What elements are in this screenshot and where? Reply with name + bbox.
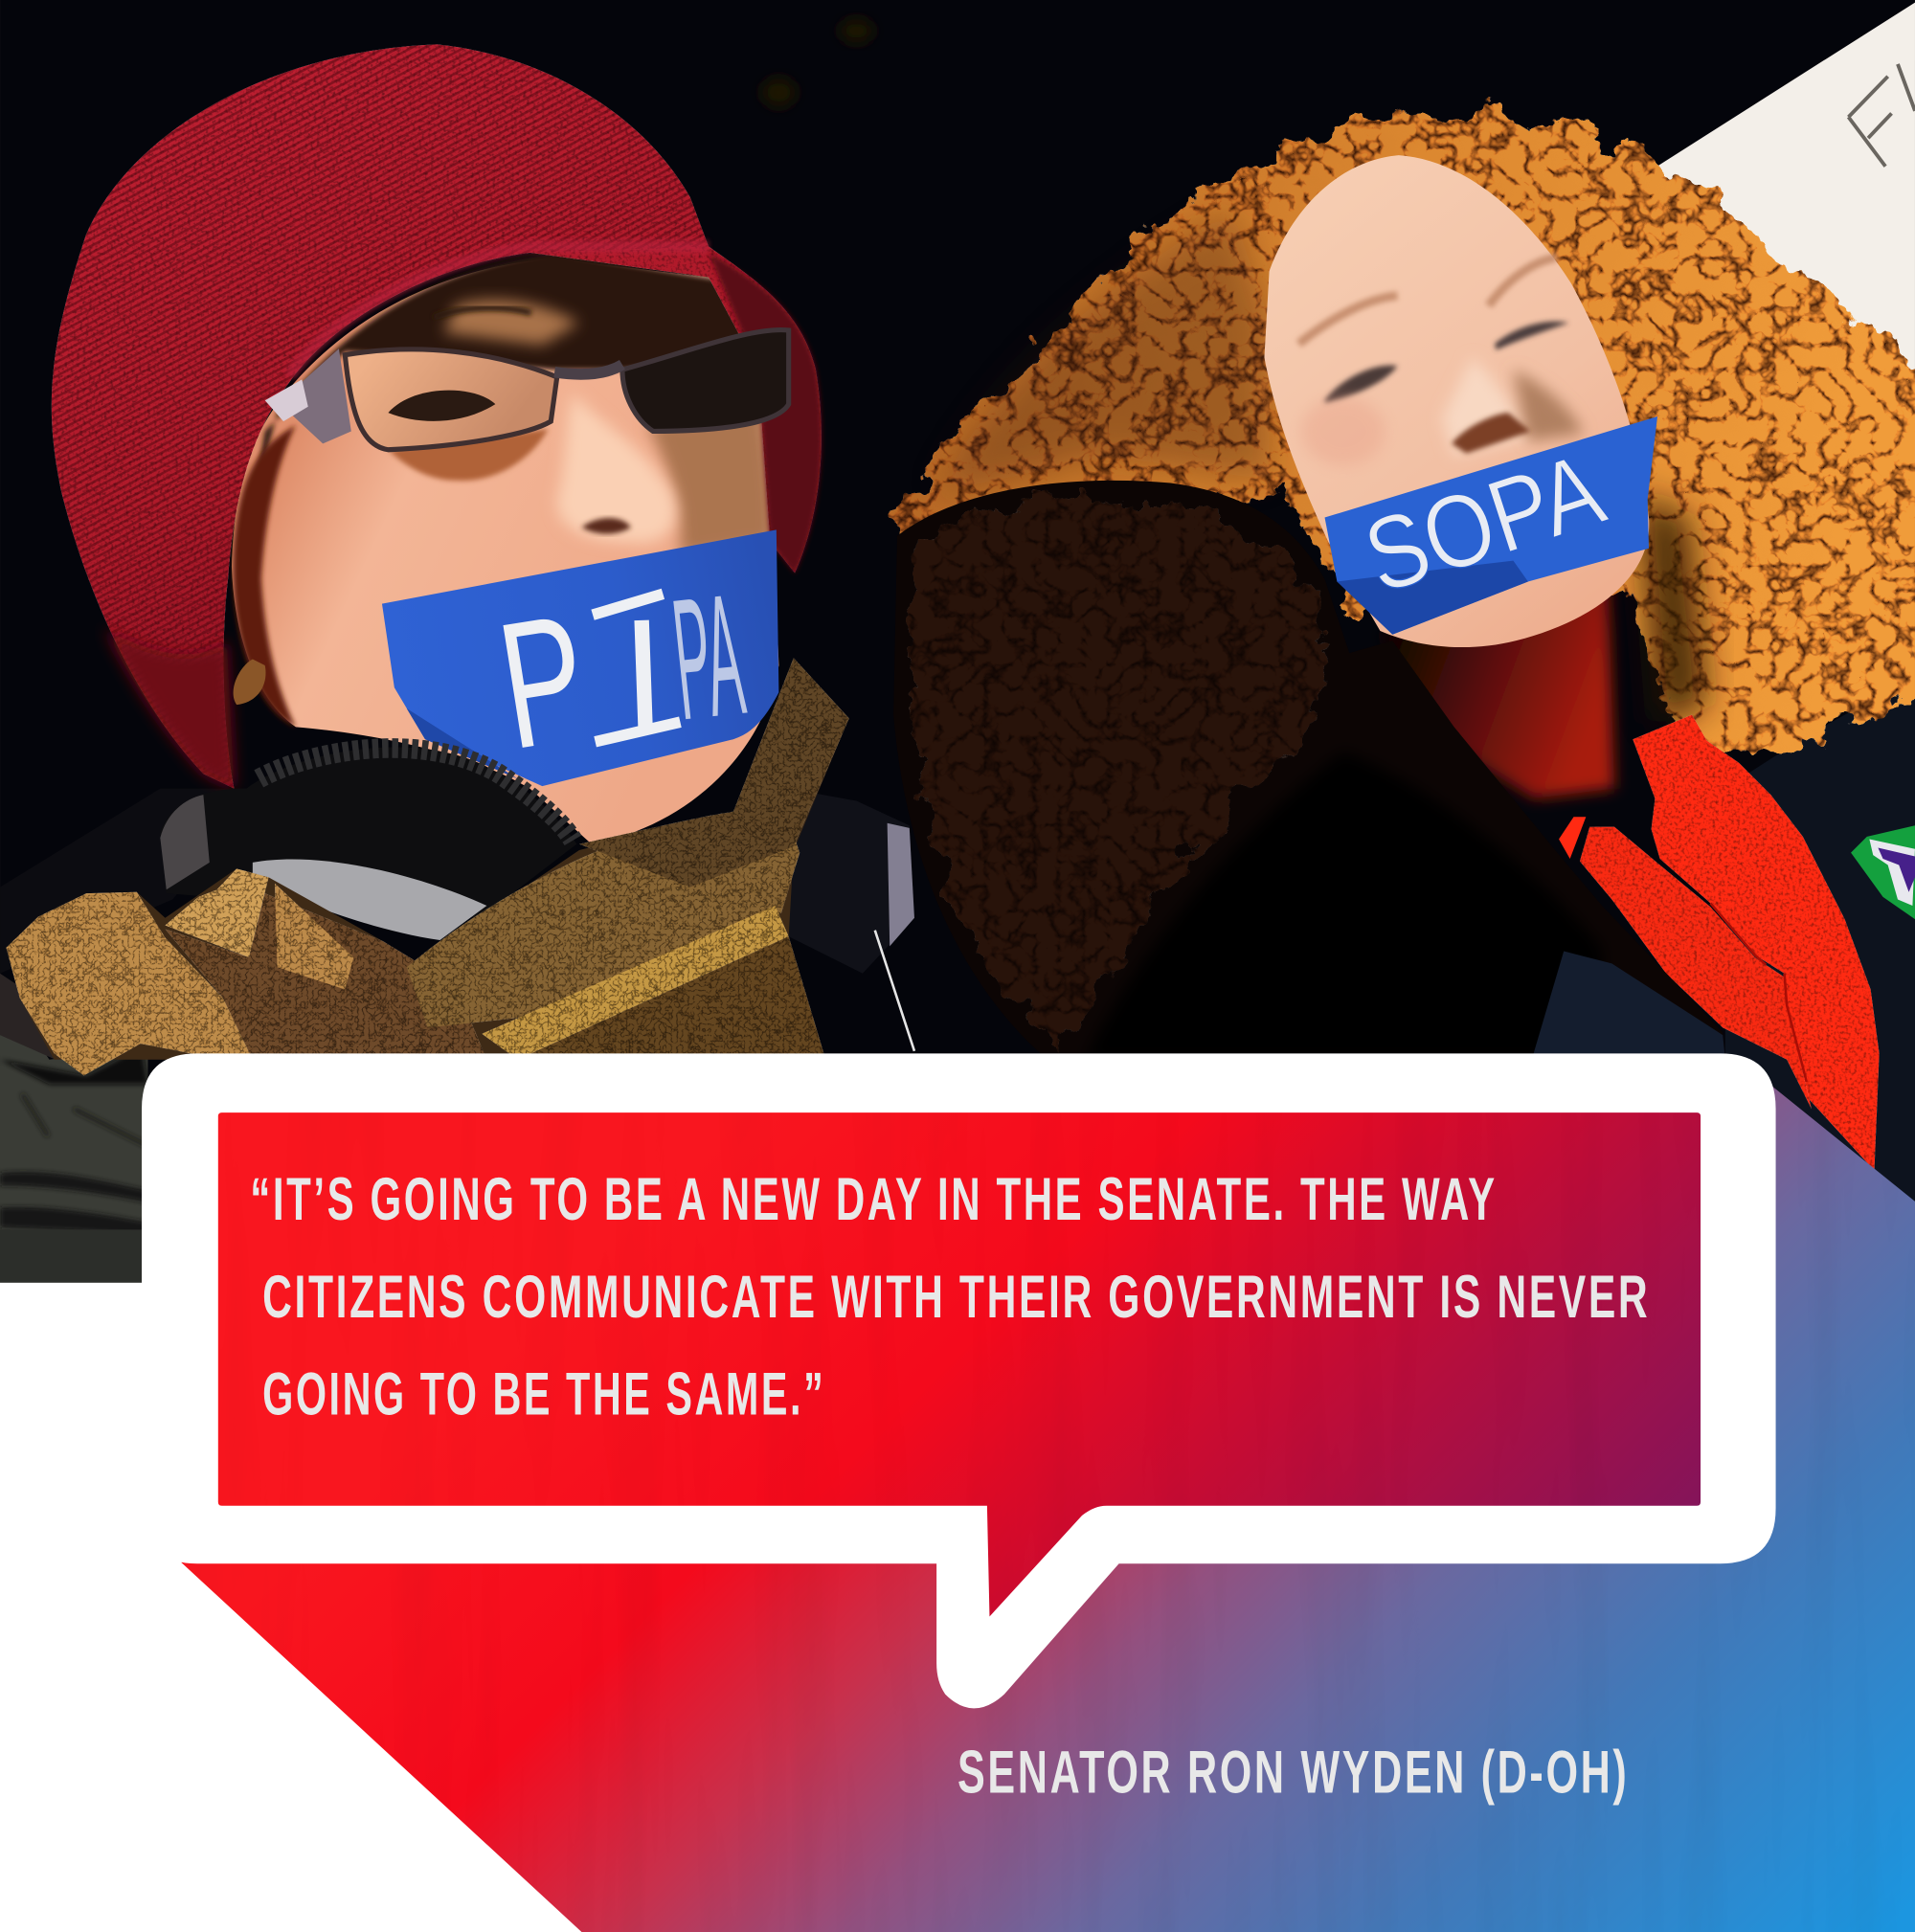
person one: tape label: I [619,585,668,763]
person two: neck in shadow [1380,579,1614,798]
person two: facial features [1298,258,1584,465]
speech bubble: red quote panel with tail [218,1112,1701,1617]
protest sign paper [1658,2,1915,370]
person one: facial shading [234,253,789,727]
person two: tape label [1337,460,1609,635]
person two: tape over mouth [1325,416,1657,635]
person two: face [1264,155,1649,647]
person two: red scarf [1559,714,1880,1171]
person two: tape label: SOPA [1351,430,1616,615]
person one: jacket [0,974,147,1283]
person one: scarf [6,658,849,1076]
person two: badge [1851,825,1915,919]
gradient backdrop shape [181,1078,1915,1932]
person one: glasses [265,330,789,450]
attribution: SENATOR RON WYDEN (D-OH) [958,1740,1629,1807]
person two: jacket [1725,695,1915,1201]
person one: hat [52,44,822,789]
speech bubble: white outline with tail [142,1053,1776,1708]
person two: hair dim patch upper left [936,210,1270,493]
quote text: GOING TO BE THE SAME.” [262,1360,825,1427]
photo background [0,0,1915,1283]
quote text [250,1166,1650,1427]
person one: tape over mouth [382,529,778,786]
person one: headphones [160,748,576,940]
person one: tape label: P [487,575,599,787]
person two: lit curly hair [900,110,1915,757]
person one: face [232,258,778,844]
scarf base layer [6,658,849,1060]
person two: hair shaded beside neck [1639,493,1706,727]
person one: right headphone cup [789,789,914,1051]
person two: shadow cast on hair and body [893,481,1725,1060]
photo: two protesters with taped mouths: PA [665,558,752,756]
person one: ear [234,660,266,705]
photo: two protesters with taped mouths [0,0,1915,1283]
person one: tape label [407,558,752,787]
scarf knit pieces [6,658,849,1076]
